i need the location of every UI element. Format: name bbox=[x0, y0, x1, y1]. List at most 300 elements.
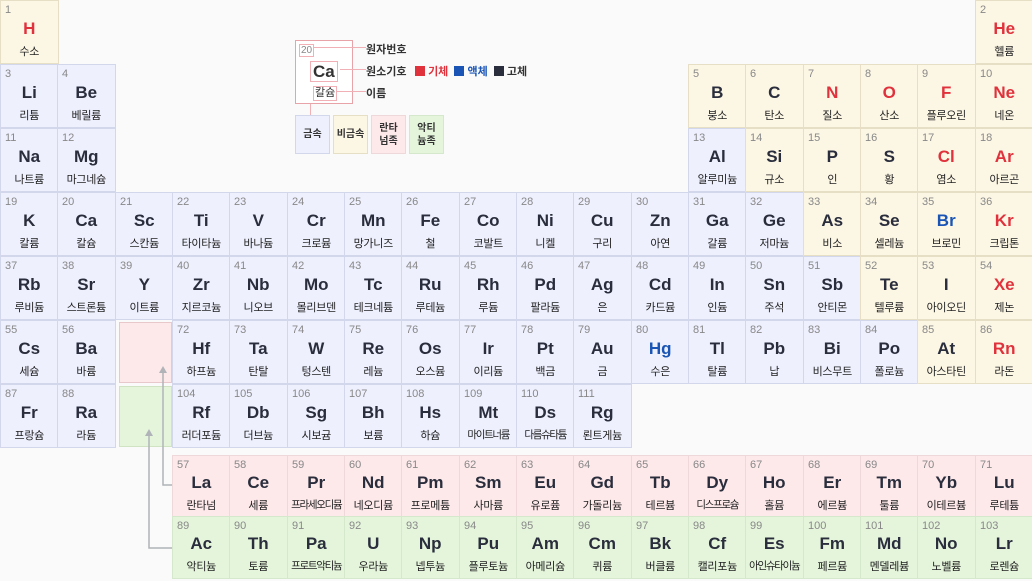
text: 더브늄 bbox=[244, 430, 273, 442]
text: Ar bbox=[995, 147, 1014, 166]
text: 붕소 bbox=[707, 110, 727, 122]
state key: 기체 액체 고체 bbox=[428, 66, 527, 78]
text: At bbox=[937, 339, 955, 358]
text: 다름슈타튬 bbox=[524, 429, 566, 441]
lanthanide row: 란타넘 bbox=[187, 500, 216, 512]
text: Y bbox=[139, 275, 150, 294]
text: 97 bbox=[636, 520, 648, 532]
text: Tb bbox=[650, 473, 671, 492]
text: 64 bbox=[578, 459, 590, 471]
text: Tc bbox=[364, 275, 383, 294]
text: 테크네튬 bbox=[354, 302, 393, 314]
text: 우라늄 bbox=[359, 561, 388, 573]
text: 악티 bbox=[417, 122, 436, 134]
text: 플루토늄 bbox=[469, 561, 508, 573]
text: 나트륨 bbox=[15, 174, 44, 186]
text: 14 bbox=[750, 132, 762, 144]
text: 스칸듐 bbox=[130, 238, 159, 250]
text: C bbox=[768, 83, 780, 102]
text: 몰리브덴 bbox=[297, 302, 336, 314]
text: 67 bbox=[750, 459, 762, 471]
text: 아스타틴 bbox=[927, 366, 966, 378]
text: 납 bbox=[769, 366, 779, 378]
text: Br bbox=[937, 211, 956, 230]
text: 하슘 bbox=[420, 430, 440, 442]
text: Hg bbox=[649, 339, 672, 358]
text: 56 bbox=[62, 324, 74, 336]
text: Rn bbox=[993, 339, 1016, 358]
text: Es bbox=[764, 534, 785, 553]
actinide row: 악티늄 bbox=[187, 561, 216, 573]
text: 31 bbox=[693, 196, 705, 208]
text: 37 bbox=[5, 260, 17, 272]
text: Pa bbox=[306, 534, 327, 553]
text: 35 bbox=[922, 196, 934, 208]
text: 80 bbox=[636, 324, 648, 336]
text: 비스무트 bbox=[813, 366, 852, 378]
text: Yb bbox=[935, 473, 957, 492]
text: Lr bbox=[996, 534, 1013, 553]
text: 58 bbox=[234, 459, 246, 471]
text: Re bbox=[362, 339, 384, 358]
text: 알루미늄 bbox=[698, 174, 737, 186]
text: 86 bbox=[980, 324, 992, 336]
text: 브로민 bbox=[932, 238, 961, 250]
text: 48 bbox=[636, 260, 648, 272]
text: 104 bbox=[177, 388, 195, 400]
text: 테르븀 bbox=[646, 500, 675, 512]
text: 73 bbox=[234, 324, 246, 336]
actinide row: Ac bbox=[190, 534, 212, 553]
text: 8 bbox=[865, 68, 871, 80]
text: 망가니즈 bbox=[354, 238, 393, 250]
element cells: 수소 bbox=[19, 46, 39, 58]
text: 66 bbox=[693, 459, 705, 471]
text: 프로메튬 bbox=[411, 500, 450, 512]
text: Si bbox=[766, 147, 782, 166]
element cells bbox=[0, 0, 58, 64]
text: 3 bbox=[5, 68, 11, 80]
text: 60 bbox=[349, 459, 361, 471]
text: Ti bbox=[194, 211, 209, 230]
text: 103 bbox=[980, 520, 998, 532]
text: 텔루륨 bbox=[875, 302, 904, 314]
text: 5 bbox=[693, 68, 699, 80]
text: Rb bbox=[18, 275, 41, 294]
actinide row bbox=[172, 516, 230, 579]
text: 100 bbox=[808, 520, 826, 532]
text: Be bbox=[75, 83, 97, 102]
text: 바륨 bbox=[76, 366, 96, 378]
text: 70 bbox=[922, 459, 934, 471]
text: Nd bbox=[362, 473, 385, 492]
text: Mn bbox=[361, 211, 386, 230]
text: 마그네슘 bbox=[67, 174, 106, 186]
text: 구리 bbox=[592, 238, 612, 250]
text: Cd bbox=[649, 275, 672, 294]
text: 페르뮴 bbox=[818, 561, 847, 573]
text: 네온 bbox=[994, 110, 1014, 122]
text: 인 bbox=[827, 174, 837, 186]
text: 109 bbox=[464, 388, 482, 400]
text: I bbox=[944, 275, 949, 294]
text: 크로뮴 bbox=[302, 238, 331, 250]
text: Sr bbox=[77, 275, 95, 294]
text: Bi bbox=[824, 339, 841, 358]
text: 마이트너륨 bbox=[467, 429, 509, 441]
text: 105 bbox=[234, 388, 252, 400]
text: Po bbox=[878, 339, 900, 358]
text: 42 bbox=[292, 260, 304, 272]
text: 41 bbox=[234, 260, 246, 272]
text: Ne bbox=[993, 83, 1015, 102]
text: Cu bbox=[591, 211, 614, 230]
text: Db bbox=[247, 403, 270, 422]
text: 101 bbox=[865, 520, 883, 532]
text: F bbox=[941, 83, 951, 102]
text: 루듐 bbox=[478, 302, 498, 314]
text: S bbox=[884, 147, 895, 166]
text: P bbox=[827, 147, 838, 166]
text: 툴륨 bbox=[879, 500, 899, 512]
text: He bbox=[993, 19, 1015, 38]
text: Sc bbox=[134, 211, 155, 230]
text: 17 bbox=[922, 132, 934, 144]
text: 47 bbox=[578, 260, 590, 272]
text: Te bbox=[880, 275, 899, 294]
text: 15 bbox=[808, 132, 820, 144]
lanthanide row: La bbox=[191, 473, 211, 492]
text: 인듐 bbox=[707, 302, 727, 314]
legend labels: 원자번호 bbox=[366, 44, 406, 56]
text: 멘델레븀 bbox=[870, 561, 909, 573]
text: 26 bbox=[406, 196, 418, 208]
text: Eu bbox=[534, 473, 556, 492]
text: Na bbox=[18, 147, 40, 166]
text: 세슘 bbox=[19, 366, 39, 378]
legend sample cell: 20 bbox=[301, 45, 312, 56]
text: 36 bbox=[980, 196, 992, 208]
text: 라듐 bbox=[76, 430, 96, 442]
text: 오스뮴 bbox=[416, 366, 445, 378]
text: 12 bbox=[62, 132, 74, 144]
text: 92 bbox=[349, 520, 361, 532]
element cells: 1 bbox=[5, 4, 11, 16]
text: 이트륨 bbox=[130, 302, 159, 314]
text: 81 bbox=[693, 324, 705, 336]
text: 50 bbox=[750, 260, 762, 272]
text: Pt bbox=[537, 339, 554, 358]
text: 프로트악티늄 bbox=[291, 560, 341, 572]
text: 29 bbox=[578, 196, 590, 208]
text: 은 bbox=[597, 302, 607, 314]
text: Al bbox=[709, 147, 726, 166]
text: 뢴트게늄 bbox=[583, 430, 622, 442]
text: Se bbox=[879, 211, 900, 230]
text: O bbox=[883, 83, 896, 102]
text: 저마늄 bbox=[760, 238, 789, 250]
text: 38 bbox=[62, 260, 74, 272]
text: 13 bbox=[693, 132, 705, 144]
text: 52 bbox=[865, 260, 877, 272]
legend: 이름 bbox=[366, 88, 386, 100]
text: 캘리포늄 bbox=[698, 561, 737, 573]
text: 아인슈타이늄 bbox=[749, 560, 799, 572]
text: Au bbox=[591, 339, 614, 358]
text: 라돈 bbox=[994, 366, 1014, 378]
text: Rh bbox=[477, 275, 500, 294]
text: 탄탈 bbox=[248, 366, 268, 378]
text: 78 bbox=[521, 324, 533, 336]
text: Ag bbox=[591, 275, 614, 294]
text: 27 bbox=[464, 196, 476, 208]
text: 하프늄 bbox=[187, 366, 216, 378]
text: 러더포듐 bbox=[182, 430, 221, 442]
text: 수은 bbox=[650, 366, 670, 378]
text: Cm bbox=[589, 534, 616, 553]
text: Pr bbox=[307, 473, 325, 492]
text: 6 bbox=[750, 68, 756, 80]
text: Bk bbox=[649, 534, 671, 553]
text: Fr bbox=[21, 403, 38, 422]
text: Cl bbox=[938, 147, 955, 166]
text: 루테늄 bbox=[416, 302, 445, 314]
text: 20 bbox=[62, 196, 74, 208]
text: 프라세오디뮴 bbox=[291, 499, 341, 511]
legend bbox=[295, 40, 527, 115]
text: 니오브 bbox=[244, 302, 273, 314]
text: 94 bbox=[464, 520, 476, 532]
text: 넵투늄 bbox=[416, 561, 445, 573]
text: Tm bbox=[876, 473, 902, 492]
text: 리튬 bbox=[19, 110, 39, 122]
text: 85 bbox=[922, 324, 934, 336]
text: 33 bbox=[808, 196, 820, 208]
text: Lu bbox=[994, 473, 1015, 492]
text: 79 bbox=[578, 324, 590, 336]
text: U bbox=[367, 534, 379, 553]
text: 106 bbox=[292, 388, 310, 400]
text: 44 bbox=[406, 260, 418, 272]
text: Mo bbox=[304, 275, 329, 294]
text: Nb bbox=[247, 275, 270, 294]
text: 75 bbox=[349, 324, 361, 336]
text: 탄소 bbox=[764, 110, 784, 122]
legend sample cell bbox=[295, 40, 353, 104]
text: Rg bbox=[591, 403, 614, 422]
text: 노벨륨 bbox=[932, 561, 961, 573]
text: 93 bbox=[406, 520, 418, 532]
text: In bbox=[710, 275, 725, 294]
text: Ho bbox=[763, 473, 786, 492]
text: 49 bbox=[693, 260, 705, 272]
text: Bh bbox=[362, 403, 385, 422]
text: 84 bbox=[865, 324, 877, 336]
text: 늄족 bbox=[417, 136, 436, 146]
text: 110 bbox=[521, 388, 539, 400]
text: 24 bbox=[292, 196, 304, 208]
text: 텅스텐 bbox=[302, 366, 331, 378]
text: 사마륨 bbox=[474, 500, 503, 512]
text: 아메리슘 bbox=[526, 561, 565, 573]
text: 스트론튬 bbox=[67, 302, 106, 314]
category boxes: 금속 bbox=[303, 129, 322, 140]
text: 안티몬 bbox=[818, 302, 847, 314]
legend: 원소기호 bbox=[366, 66, 406, 78]
placeholder: lanthanides bbox=[119, 322, 172, 383]
text: 토륨 bbox=[248, 561, 268, 573]
text: Pm bbox=[417, 473, 443, 492]
text: 유로퓸 bbox=[531, 500, 560, 512]
text: 칼슘 bbox=[76, 238, 96, 250]
text: 10 bbox=[980, 68, 992, 80]
text: 111 bbox=[578, 388, 595, 400]
text: Mg bbox=[74, 147, 99, 166]
text: 아연 bbox=[650, 238, 670, 250]
text: 19 bbox=[5, 196, 17, 208]
text: 산소 bbox=[879, 110, 899, 122]
text: 88 bbox=[62, 388, 74, 400]
text: 28 bbox=[521, 196, 533, 208]
text: 51 bbox=[808, 260, 820, 272]
text: 39 bbox=[120, 260, 132, 272]
text: 108 bbox=[406, 388, 424, 400]
text: Ce bbox=[247, 473, 269, 492]
text: 55 bbox=[5, 324, 17, 336]
text: 바나듐 bbox=[244, 238, 273, 250]
text: 폴로늄 bbox=[875, 366, 904, 378]
text: 43 bbox=[349, 260, 361, 272]
text: K bbox=[23, 211, 35, 230]
text: W bbox=[308, 339, 324, 358]
legend sample cell: 칼슘 bbox=[315, 87, 335, 99]
text: 염소 bbox=[936, 174, 956, 186]
text: 규소 bbox=[764, 174, 784, 186]
text: 98 bbox=[693, 520, 705, 532]
text: 금 bbox=[597, 366, 607, 378]
text: Ba bbox=[75, 339, 97, 358]
text: Pd bbox=[534, 275, 556, 294]
text: 102 bbox=[922, 520, 940, 532]
text: 7 bbox=[808, 68, 814, 80]
text: Sg bbox=[305, 403, 327, 422]
text: 90 bbox=[234, 520, 246, 532]
text: 크립톤 bbox=[990, 238, 1019, 250]
text: Sb bbox=[821, 275, 843, 294]
text: Zn bbox=[650, 211, 671, 230]
text: 16 bbox=[865, 132, 877, 144]
text: 레늄 bbox=[363, 366, 383, 378]
text: 21 bbox=[120, 196, 132, 208]
text: 22 bbox=[177, 196, 189, 208]
text: 4 bbox=[62, 68, 68, 80]
text: B bbox=[711, 83, 723, 102]
text: 철 bbox=[425, 238, 435, 250]
text: 71 bbox=[980, 459, 992, 471]
category boxes bbox=[295, 115, 330, 154]
text: Zr bbox=[193, 275, 210, 294]
lanthanide row: 57 bbox=[177, 459, 189, 471]
text: N bbox=[826, 83, 838, 102]
text: 34 bbox=[865, 196, 877, 208]
text: 11 bbox=[5, 132, 16, 144]
element cells: H bbox=[23, 19, 35, 38]
text: Gd bbox=[590, 473, 614, 492]
text: 홀뮴 bbox=[764, 500, 784, 512]
text: 82 bbox=[750, 324, 762, 336]
text: Fe bbox=[420, 211, 440, 230]
text: Pb bbox=[763, 339, 785, 358]
text: 96 bbox=[578, 520, 590, 532]
text: Li bbox=[22, 83, 37, 102]
text: 질소 bbox=[822, 110, 842, 122]
text: Pu bbox=[477, 534, 499, 553]
text: V bbox=[253, 211, 264, 230]
text: 아르곤 bbox=[990, 174, 1019, 186]
text: 40 bbox=[177, 260, 189, 272]
text: 황 bbox=[884, 174, 894, 186]
text: 주석 bbox=[764, 302, 784, 314]
text: 2 bbox=[980, 4, 986, 16]
text: Rf bbox=[192, 403, 210, 422]
text: 퀴륨 bbox=[592, 561, 612, 573]
text: 갈륨 bbox=[707, 238, 727, 250]
text: 가돌리늄 bbox=[583, 500, 622, 512]
text: Np bbox=[419, 534, 442, 553]
text: 107 bbox=[349, 388, 367, 400]
text: Th bbox=[248, 534, 269, 553]
text: 46 bbox=[521, 260, 533, 272]
text: Ta bbox=[249, 339, 268, 358]
actinide row: 89 bbox=[177, 520, 189, 532]
text: 란타 bbox=[379, 122, 398, 134]
text: Cf bbox=[708, 534, 726, 553]
text: As bbox=[821, 211, 843, 230]
text: 25 bbox=[349, 196, 361, 208]
text: 61 bbox=[406, 459, 418, 471]
text: 에르븀 bbox=[818, 500, 847, 512]
text: 디스프로슘 bbox=[696, 499, 738, 511]
text: 비금속 bbox=[337, 129, 364, 140]
text: 53 bbox=[922, 260, 934, 272]
text: Co bbox=[477, 211, 500, 230]
text: 이리듐 bbox=[474, 366, 503, 378]
text: 백금 bbox=[535, 366, 555, 378]
text: 코발트 bbox=[474, 238, 503, 250]
text: 칼륨 bbox=[19, 238, 39, 250]
text: 23 bbox=[234, 196, 246, 208]
text: 넘족 bbox=[379, 136, 398, 146]
text: Ds bbox=[534, 403, 556, 422]
text: Sm bbox=[475, 473, 501, 492]
text: Ga bbox=[706, 211, 729, 230]
text: 9 bbox=[922, 68, 928, 80]
text: 30 bbox=[636, 196, 648, 208]
text: 타이타늄 bbox=[182, 238, 221, 250]
text: Cs bbox=[18, 339, 40, 358]
lanthanide row bbox=[172, 455, 230, 517]
text: 77 bbox=[464, 324, 476, 336]
text: Ge bbox=[763, 211, 786, 230]
text: 62 bbox=[464, 459, 476, 471]
text: 69 bbox=[865, 459, 877, 471]
text: Tl bbox=[710, 339, 725, 358]
text: 91 bbox=[292, 520, 304, 532]
text: 63 bbox=[521, 459, 533, 471]
legend sample cell: Ca bbox=[313, 62, 335, 81]
text: 비소 bbox=[822, 238, 842, 250]
text: Kr bbox=[995, 211, 1014, 230]
